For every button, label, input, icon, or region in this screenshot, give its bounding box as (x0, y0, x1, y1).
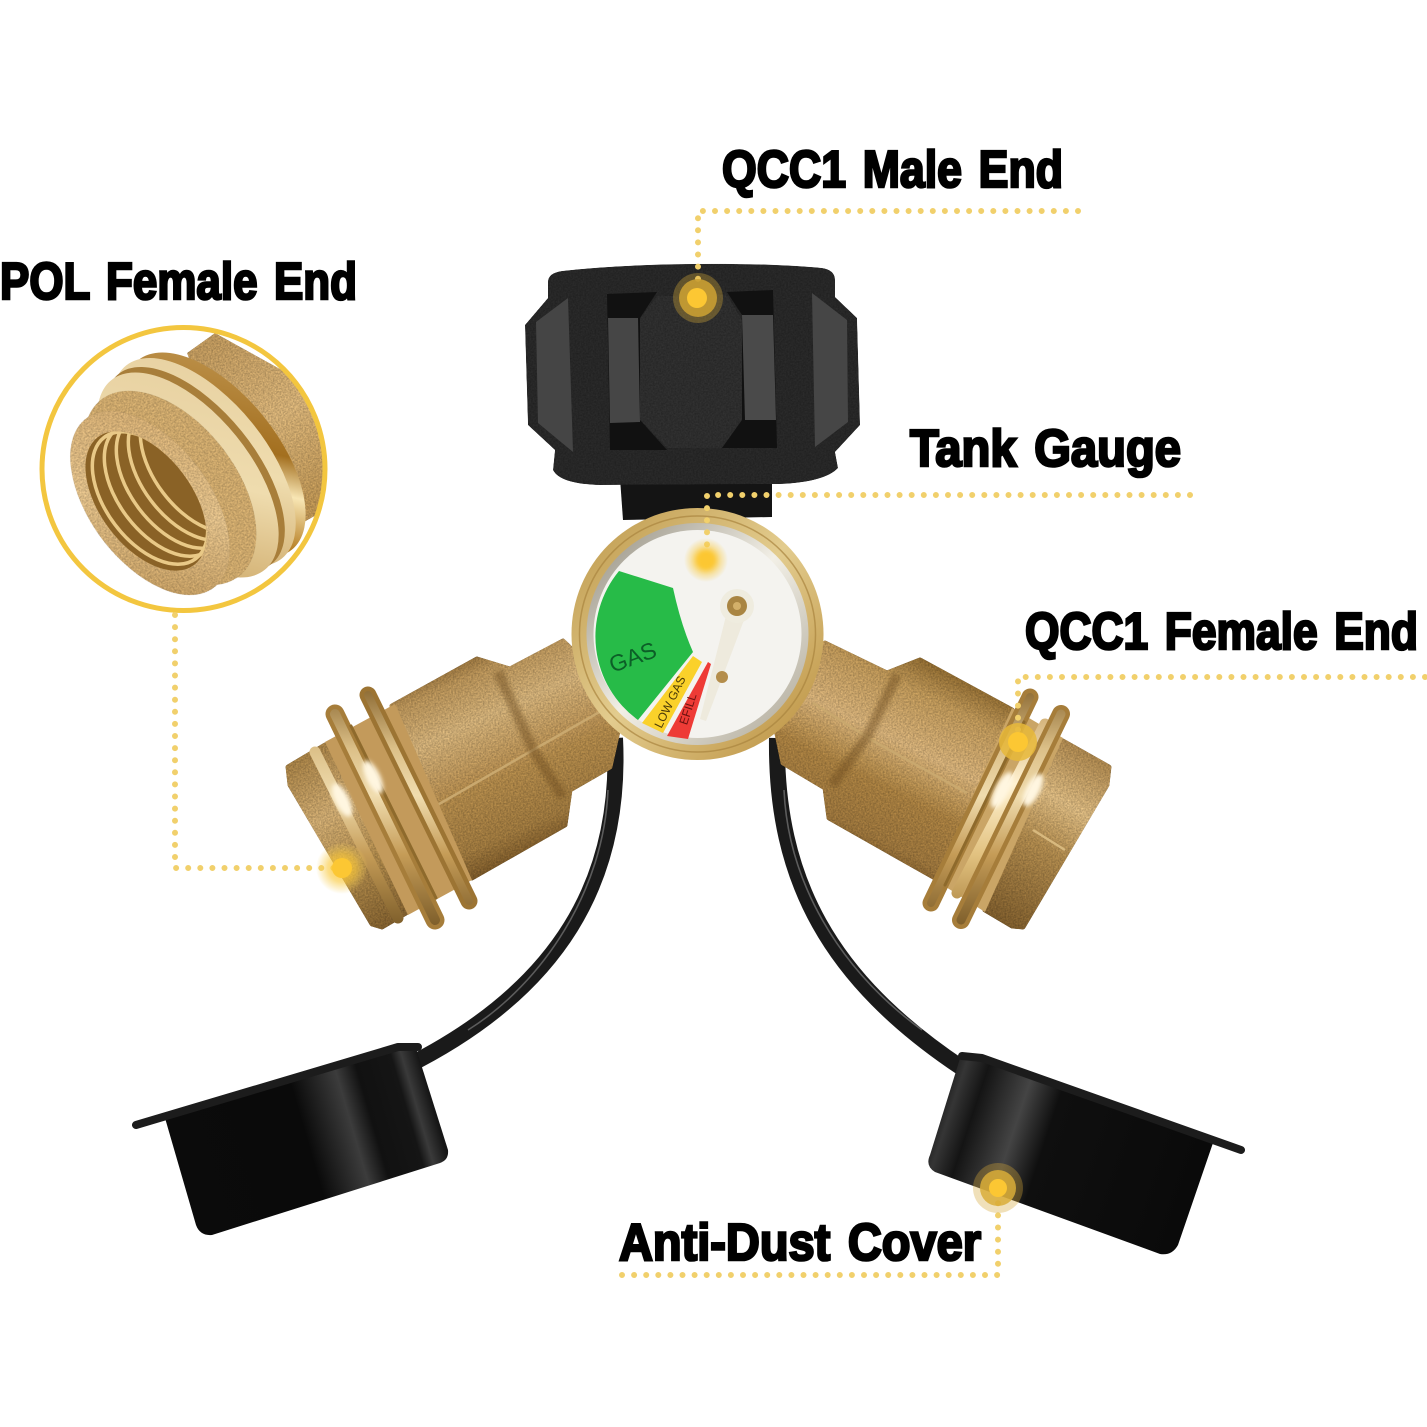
strap: left cap tether (405, 738, 616, 1067)
gauge yellow zone (642, 656, 702, 733)
callout: QCC1 female end (999, 603, 1425, 761)
callout: tank gauge (684, 420, 1190, 582)
left cap: anti-dust cover (136, 1045, 448, 1235)
strap: right cap tether (777, 738, 962, 1068)
gauge low gas label: LOW GAS (651, 674, 689, 730)
label: QCC1 Male End (722, 141, 1063, 199)
gauge GAS label: GAS (605, 637, 660, 678)
leader line (1018, 677, 1425, 742)
tank gauge (572, 508, 824, 760)
hotspot (316, 842, 368, 894)
knob centre column (640, 294, 742, 448)
hotspot (684, 538, 728, 582)
inset threaded bore (85, 431, 207, 571)
leader line (622, 1188, 998, 1275)
knob side panel right (812, 293, 848, 447)
label: Tank Gauge (910, 420, 1181, 478)
gauge red zone (667, 662, 711, 739)
leader line (175, 615, 342, 868)
left arm threads (315, 695, 472, 920)
callout: QCC1 male end (673, 141, 1078, 323)
gauge brass bezel (572, 508, 824, 760)
callout: anti-dust cover (619, 1163, 1023, 1275)
knob stem (620, 478, 772, 520)
hotspot (673, 273, 723, 323)
inset: POL female end (38, 321, 340, 624)
knob left grip recess (607, 292, 667, 450)
right brass arm (770, 643, 1109, 927)
gauge dial (594, 530, 802, 738)
gauge needle (700, 612, 747, 721)
label: POL Female End (0, 253, 357, 311)
callout: POL female end (0, 253, 368, 894)
right arm threads (931, 697, 1063, 920)
left brass arm (288, 641, 625, 927)
right arm body (770, 643, 1109, 927)
gauge stop pin (716, 671, 728, 683)
hotspot (973, 1163, 1023, 1213)
right cap: anti-dust cover (928, 1052, 1241, 1254)
knob side panel left (536, 298, 573, 452)
gauge green zone (595, 571, 693, 720)
leader line (698, 211, 1078, 298)
left arm body (288, 641, 625, 927)
inset yellow ring (42, 328, 325, 610)
leader line (707, 495, 1190, 560)
label: Anti-Dust Cover (619, 1214, 981, 1272)
knob: QCC1 black nut (525, 264, 860, 520)
hotspot (999, 723, 1037, 761)
knob right grip recess (722, 290, 777, 448)
inset brass fitting (70, 334, 322, 596)
gauge refill label: EFILL (676, 691, 700, 726)
